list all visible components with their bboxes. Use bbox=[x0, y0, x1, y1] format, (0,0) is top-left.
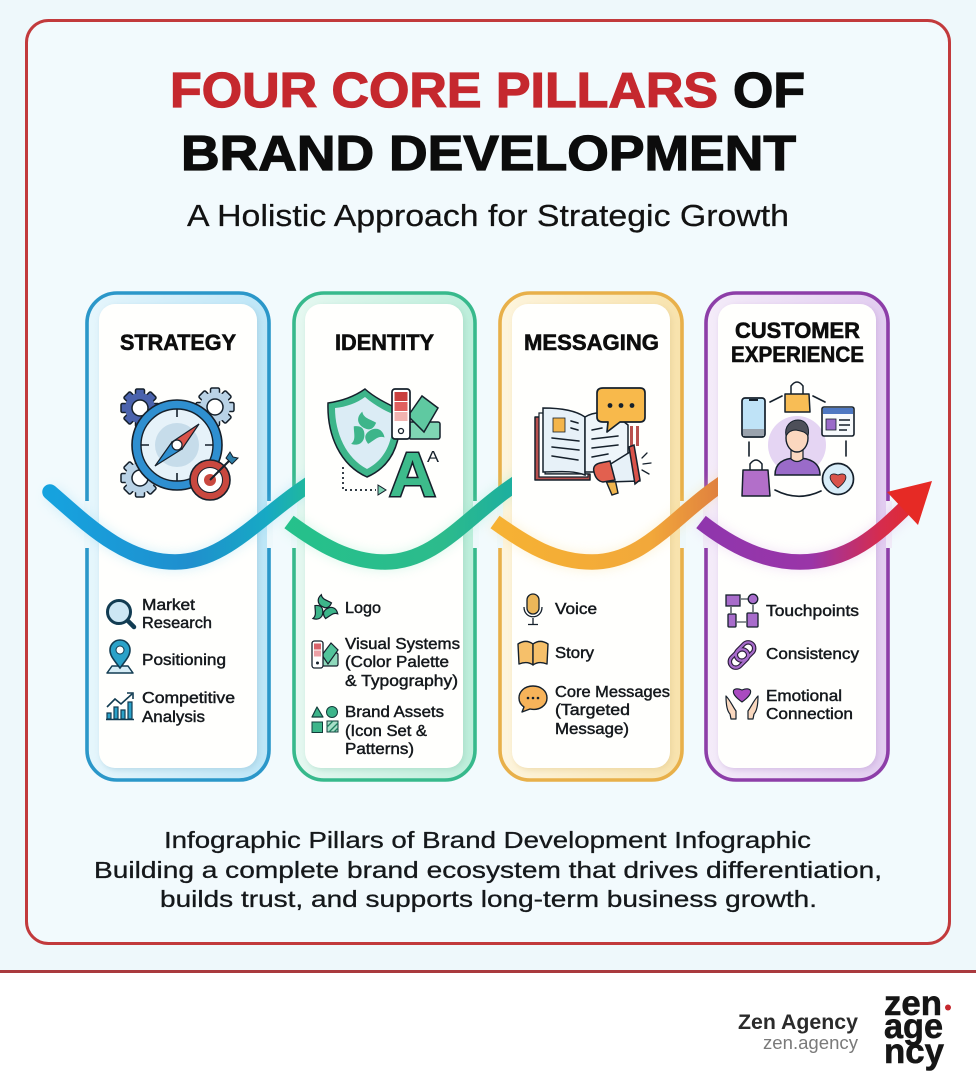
item: touchpoints: Touchpoints bbox=[766, 603, 859, 620]
item: competitive analysis: Competitive bbox=[142, 690, 235, 707]
heading: messaging: MESSAGING bbox=[524, 330, 659, 355]
caption bbox=[94, 827, 882, 912]
panel: messaging bbox=[497, 293, 686, 780]
item: emotional connection: Connection bbox=[766, 706, 853, 723]
item: voice: Voice bbox=[555, 601, 597, 618]
item: positioning: Positioning bbox=[142, 652, 226, 669]
item: emotional connection: Emotional bbox=[766, 688, 842, 705]
item: logo: Logo bbox=[345, 600, 381, 617]
footer: logo: zen bbox=[884, 984, 942, 1023]
heading: customer experience bbox=[731, 318, 864, 367]
item: brand assets: Patterns) bbox=[345, 741, 414, 758]
item: brand assets: Brand Assets bbox=[345, 704, 444, 721]
subtitle: A Holistic Approach for Strategic Growth bbox=[187, 198, 789, 233]
heading: customer experience: CUSTOMER bbox=[735, 318, 860, 343]
item: visual systems: (Color Palette bbox=[345, 654, 449, 671]
footer: agency name bbox=[738, 1011, 858, 1053]
item: touchpoints bbox=[726, 594, 859, 627]
footer: logo bbox=[884, 984, 951, 1071]
panel: customer experience bbox=[703, 293, 892, 780]
item: visual systems: & Typography) bbox=[345, 673, 458, 690]
title: FOUR CORE PILLARS bbox=[170, 64, 718, 118]
footer: logo: ncy bbox=[884, 1032, 945, 1071]
icon: shield, palette and type: A bbox=[427, 449, 439, 466]
item: logo bbox=[308, 595, 381, 623]
item: consistency bbox=[727, 640, 859, 670]
title bbox=[170, 64, 805, 181]
icon: customer journey cycle bbox=[742, 382, 854, 496]
item: market research bbox=[108, 597, 212, 632]
item: core messages bbox=[519, 684, 670, 738]
title: OF bbox=[733, 64, 805, 118]
title: BRAND DEVELOPMENT bbox=[181, 127, 796, 181]
panel: identity bbox=[291, 293, 479, 780]
item: positioning bbox=[107, 640, 226, 673]
item: core messages: Message) bbox=[555, 721, 629, 738]
ribbon: messaging bbox=[495, 476, 734, 562]
item: voice bbox=[524, 594, 597, 624]
item: brand assets: (Icon Set & bbox=[345, 723, 427, 740]
caption: Infographic Pillars of Brand Development Infographic bbox=[164, 827, 811, 853]
item: competitive analysis bbox=[106, 690, 235, 726]
ribbon: customer experience with arrow bbox=[701, 481, 932, 562]
icon: open book, speech bubble and megaphone bbox=[535, 388, 651, 495]
arrowhead bbox=[887, 481, 932, 525]
item: brand assets bbox=[312, 704, 444, 758]
footer: logo: age bbox=[884, 1007, 943, 1046]
item: market research: Research bbox=[142, 615, 212, 632]
item: emotional connection bbox=[726, 688, 853, 723]
heading: identity: IDENTITY bbox=[335, 330, 434, 355]
footer: agency name: Zen Agency bbox=[738, 1011, 858, 1034]
heading: strategy: STRATEGY bbox=[120, 330, 236, 355]
icon: compass with gears and target bbox=[121, 388, 238, 500]
item: core messages: Core Messages bbox=[555, 684, 670, 701]
item: story: Story bbox=[555, 645, 594, 662]
ribbon: identity bbox=[289, 476, 528, 562]
panel: strategy bbox=[84, 293, 273, 780]
icon: shield, palette and type: A bbox=[389, 441, 436, 510]
caption: Building a complete brand ecosystem that drives differentiation, bbox=[94, 857, 882, 883]
item: core messages: (Targeted bbox=[555, 702, 630, 719]
item: visual systems: Visual Systems bbox=[345, 636, 460, 653]
item: competitive analysis: Analysis bbox=[142, 709, 205, 726]
ribbon: strategy bbox=[50, 476, 322, 562]
item: consistency: Consistency bbox=[766, 646, 859, 663]
item: story bbox=[518, 641, 594, 665]
icon: shield, palette and type bbox=[328, 389, 440, 510]
caption: builds trust, and supports long-term business growth. bbox=[160, 886, 817, 912]
heading: customer experience: EXPERIENCE bbox=[731, 342, 864, 367]
footer: agency name: zen.agency bbox=[763, 1033, 858, 1053]
item: visual systems bbox=[312, 636, 460, 690]
item: market research: Market bbox=[142, 597, 196, 614]
